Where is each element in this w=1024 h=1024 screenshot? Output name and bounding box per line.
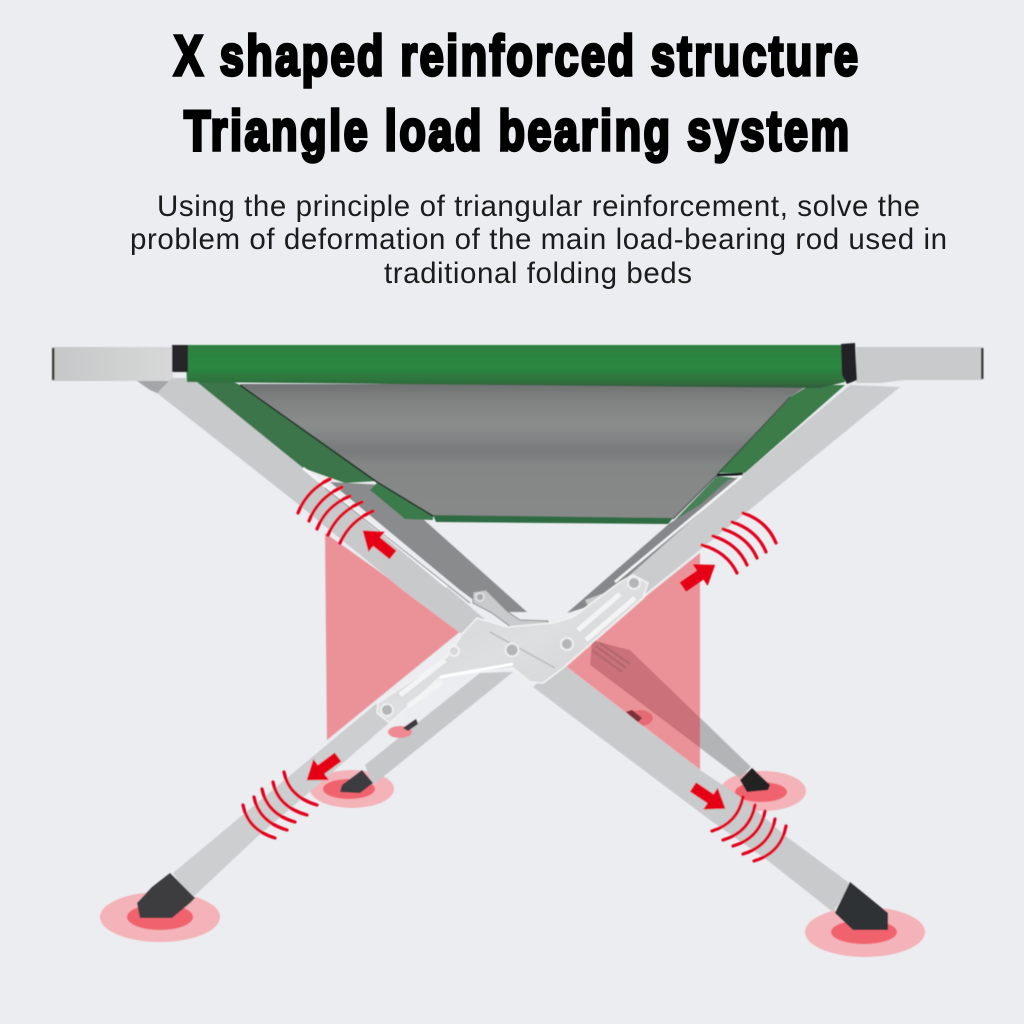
front leg: top-right upper segment — [585, 385, 900, 630]
description text — [130, 190, 947, 290]
stress arcs: upper right — [702, 513, 776, 573]
description text: traditional folding beds — [384, 257, 692, 290]
arrow: upper left — [354, 520, 401, 565]
front rubber feet — [137, 873, 888, 930]
description text: Using the principle of triangular reinforcement, solve the — [157, 190, 920, 223]
red triangle: left — [325, 533, 462, 740]
fabric underside — [190, 378, 845, 524]
small rear foot marks — [388, 643, 653, 738]
red triangle: right — [560, 553, 700, 770]
centre hinge bracket — [377, 575, 648, 723]
rear support band, right — [567, 476, 743, 613]
folding bed illustration — [52, 343, 984, 957]
rear legs — [330, 482, 770, 793]
stress arcs: lower right — [712, 797, 786, 861]
title: X shaped reinforced structure — [174, 23, 858, 87]
stress arcs: upper left — [298, 479, 373, 543]
foot pressure zones, rear — [310, 770, 806, 811]
front leg: bottom-right lower segment — [533, 662, 852, 912]
stress arcs: lower left — [243, 772, 317, 838]
top frame bars — [52, 347, 984, 398]
description text: problem of deformation of the main load-bearing rod used in — [130, 223, 947, 256]
front leg: top-left upper segment — [157, 378, 495, 640]
title — [174, 23, 858, 162]
fabric top edge — [185, 345, 845, 388]
front leg: bottom-left lower segment — [173, 703, 390, 900]
arrow: lower right — [686, 776, 733, 819]
foot pressure zones, front — [100, 892, 925, 957]
arrow: lower left — [299, 747, 346, 791]
arrow: upper right — [676, 554, 723, 598]
black frame caps — [172, 343, 857, 384]
title: Triangle load bearing system — [184, 98, 849, 162]
